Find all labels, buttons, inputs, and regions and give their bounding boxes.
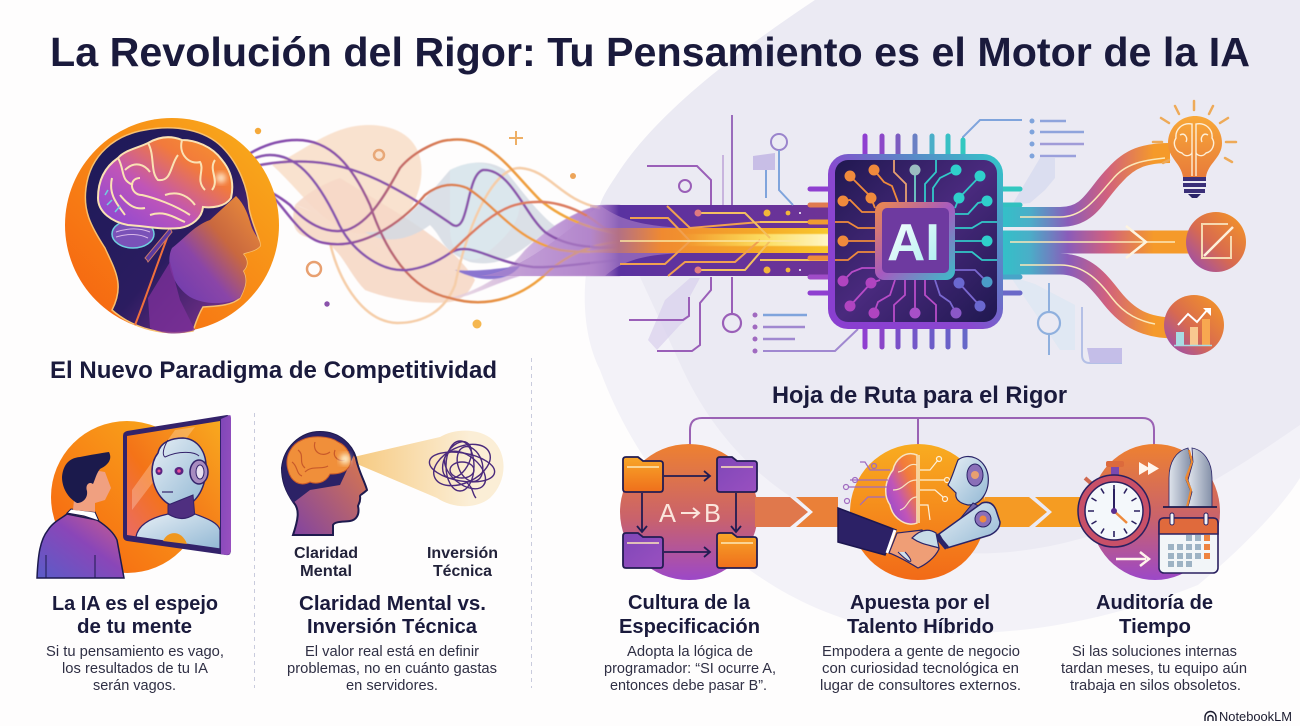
card text: clarity: en servidores. (346, 678, 438, 694)
card text: specification: entonces debe pasar B”. (610, 678, 767, 694)
card text: time audit (1061, 591, 1247, 694)
card text: hybrid talent: Empodera a gente de negocio (822, 644, 1020, 660)
card text: hybrid talent: Apuesta por el (850, 591, 990, 614)
footer: NotebookLM logo: NotebookLM (1219, 709, 1292, 724)
arrow band to talent (755, 497, 808, 527)
card text: specification: Especificación (619, 615, 760, 638)
card text: specification (604, 591, 776, 694)
heading: new paradigm: El Nuevo Paradigma de Competitividad (50, 357, 497, 384)
label A to B (659, 498, 721, 528)
man (37, 514, 124, 578)
calendar (1159, 513, 1218, 573)
arrow band to audit (985, 497, 1047, 527)
card text: mirror: La IA es el espejo (52, 592, 218, 615)
brain (287, 437, 350, 484)
circuit decorations left of chip (629, 115, 858, 354)
dashed dividers (254, 358, 532, 688)
label A to B: A (659, 498, 677, 528)
card text: clarity: Inversión Técnica (307, 615, 478, 638)
card text: time audit: trabaja en silos obsoletos. (1070, 678, 1241, 694)
icon: head projecting to tangle (282, 431, 504, 535)
card text: hybrid talent (820, 591, 1021, 694)
rays (1153, 101, 1236, 163)
icon: specification folders (620, 444, 838, 580)
icon: document and pen (1186, 212, 1246, 272)
cerebellum (112, 220, 154, 248)
labels: clarity and investment: Inversión (427, 545, 498, 562)
labels: clarity and investment: Técnica (433, 563, 492, 580)
card text: mirror (46, 592, 224, 694)
labels: clarity and investment: Claridad (294, 545, 358, 562)
man hair (62, 452, 110, 503)
icon: growth chart (1164, 295, 1224, 355)
flow arrows (637, 471, 741, 557)
robot (948, 456, 988, 505)
card text: mirror: los resultados de tu IA (62, 661, 208, 677)
card text: time audit: Si las soluciones internas (1072, 644, 1237, 660)
heading: roadmap: Hoja de Ruta para el Rigor (772, 382, 1067, 409)
card text: time audit: Auditoría de (1096, 591, 1213, 614)
robot arm (939, 502, 1000, 548)
fast forward (1139, 462, 1159, 475)
tangle (427, 436, 497, 498)
card text: clarity: problemas, no en cuánto gastas (287, 661, 497, 677)
chip pins (810, 136, 1020, 347)
decorative dots: streams accents (255, 128, 576, 328)
circuit brain (886, 454, 917, 524)
robot in mirror (152, 438, 206, 507)
card text: time audit: tardan meses, tu equipo aún (1061, 661, 1247, 677)
circuit decorations right of chip (963, 118, 1122, 363)
bracket connector (690, 418, 1154, 446)
hands (889, 530, 939, 568)
icon: AI chip (810, 136, 1020, 347)
card text: mirror: Si tu pensamiento es vago, (46, 644, 224, 660)
icon: AI chip: AI (887, 214, 940, 272)
brain (98, 137, 232, 229)
folders (623, 457, 757, 568)
neck (148, 262, 195, 334)
man face (73, 470, 111, 512)
card text: mirror: de tu mente (77, 615, 192, 638)
icon: head with brain (65, 118, 279, 334)
card text: hybrid talent: con curiosidad tecnológica en (822, 661, 1019, 677)
card text: time audit: Tiempo (1119, 615, 1191, 638)
card text: specification: Adopta la lógica de (627, 644, 753, 660)
card text: hybrid talent: lugar de consultores externos. (820, 678, 1021, 694)
labels: clarity and investment (294, 545, 498, 580)
title: La Revolución del Rigor: Tu Pensamiento es el Motor de la IA (50, 29, 1250, 75)
icon: hybrid talent handshake (838, 444, 1085, 580)
light cone (345, 431, 504, 506)
label A to B: B (704, 498, 721, 528)
stopwatch (1078, 461, 1150, 547)
illustration: light beam band (480, 205, 830, 276)
card text: clarity: El valor real está en definir (305, 644, 479, 660)
card text: specification: programador: “SI ocurre A, (604, 661, 776, 677)
mirror (123, 415, 231, 555)
card text: hybrid talent: Talento Híbrido (847, 615, 994, 638)
chip traces (835, 160, 997, 322)
chip center (875, 202, 955, 280)
orange disc (65, 118, 279, 332)
face (169, 196, 260, 303)
circuit traces in band (620, 206, 828, 276)
orange disc (51, 421, 203, 573)
chip nodes (838, 164, 992, 318)
icon: time audit (1078, 444, 1220, 580)
head silhouette (85, 128, 260, 333)
icon: man and robot in mirror (37, 415, 231, 578)
icon: light bulb with brain (1153, 101, 1236, 198)
card text: clarity: Claridad Mental vs. (299, 592, 486, 615)
card text: mirror: serán vagos. (93, 678, 176, 694)
output streams (1003, 153, 1190, 328)
white arrow (1116, 552, 1149, 566)
illustration: thought streams (222, 125, 660, 323)
head (282, 432, 367, 535)
broken silos (1169, 448, 1191, 507)
labels: clarity and investment: Mental (300, 563, 352, 580)
card text: clarity (287, 592, 497, 694)
suit sleeve (838, 508, 896, 555)
card text: specification: Cultura de la (628, 591, 751, 614)
